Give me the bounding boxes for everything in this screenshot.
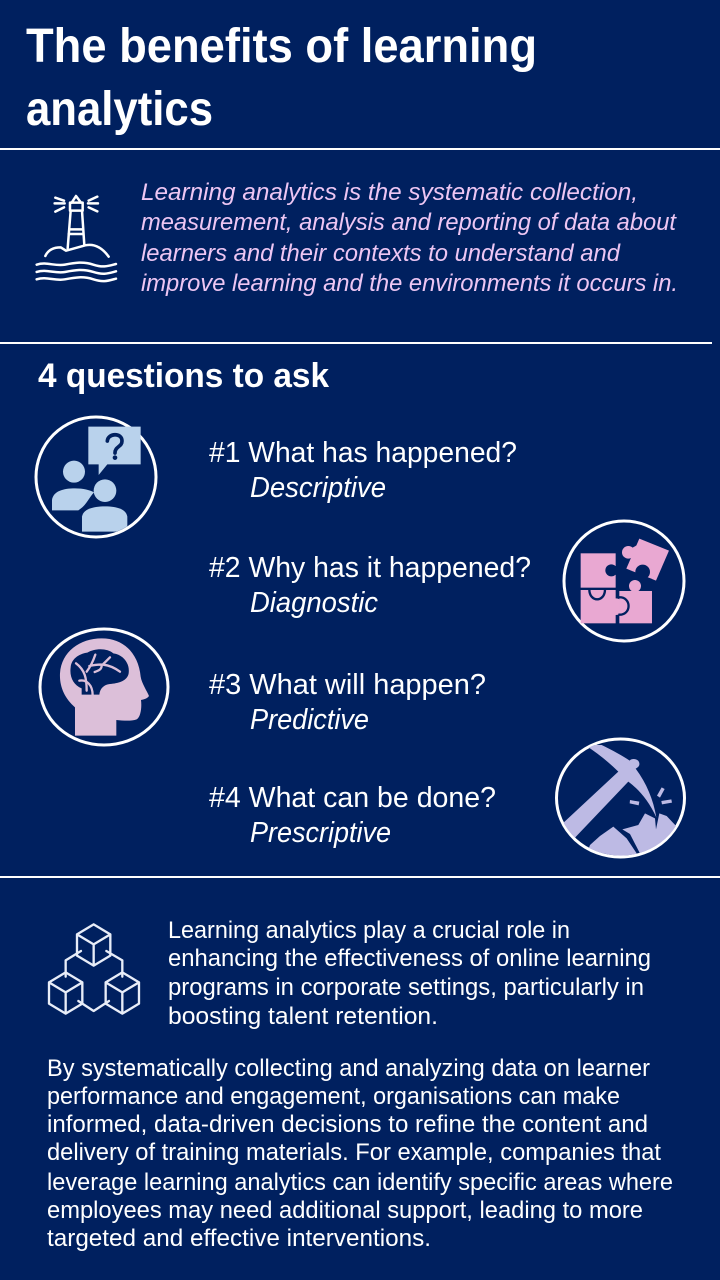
intro text: learners and their contexts to understand and [141,240,621,267]
intro text: measurement, analysis and reporting of data about [141,209,677,236]
question 2 [209,552,531,619]
question 2: Diagnostic [250,587,378,619]
icon: people with question bubble [36,417,156,537]
question 3: Predictive [250,704,369,736]
paragraph: data-driven decisions: targeted and effective interventions. [47,1225,431,1252]
paragraph: crucial role [168,917,651,1030]
title [26,20,537,136]
paragraph: crucial role: boosting talent retention. [168,1003,438,1030]
icon: head with brain [40,629,168,745]
paragraph: crucial role: enhancing the effectiveness of online learning [168,945,651,972]
icon: pickaxe and rock [556,739,684,860]
paragraph: data-driven decisions: informed, data-driven decisions to refine the content and [47,1111,648,1138]
icon: lighthouse [37,196,116,281]
question 4 [209,782,496,849]
icon: puzzle [564,521,684,641]
paragraph: crucial role: programs in corporate settings, particularly in [168,974,644,1001]
title: The benefits of learning [26,20,537,73]
question 4: Prescriptive [250,817,391,849]
question 1: Descriptive [250,472,386,504]
paragraph: crucial role: Learning analytics play a crucial role in [168,917,570,944]
question 1 [209,437,517,504]
paragraph: data-driven decisions: performance and engagement, organisations can make [47,1083,620,1110]
paragraph: data-driven decisions: leverage learning analytics can identify specific areas where [47,1169,673,1196]
paragraph: data-driven decisions: delivery of training materials. For example, companies that [47,1139,661,1166]
title: analytics [26,83,213,136]
intro text: Learning analytics is the systematic collection, [141,179,638,206]
paragraph: data-driven decisions: By systematically collecting and analyzing data on learner [47,1055,650,1082]
paragraph: data-driven decisions [47,1055,673,1252]
icon: connected cubes [49,924,139,1014]
intro text [141,179,678,297]
question 3 [209,669,486,736]
question 4: #4 What can be done? [209,782,496,814]
question 2: #2 Why has it happened? [209,552,531,584]
question 3: #3 What will happen? [209,669,486,701]
heading: 4 questions to ask: 4 questions to ask [38,357,329,395]
paragraph: data-driven decisions: employees may need additional support, leading to more [47,1197,643,1224]
intro text: improve learning and the environments it occurs in. [141,270,678,297]
question 1: #1 What has happened? [209,437,517,469]
